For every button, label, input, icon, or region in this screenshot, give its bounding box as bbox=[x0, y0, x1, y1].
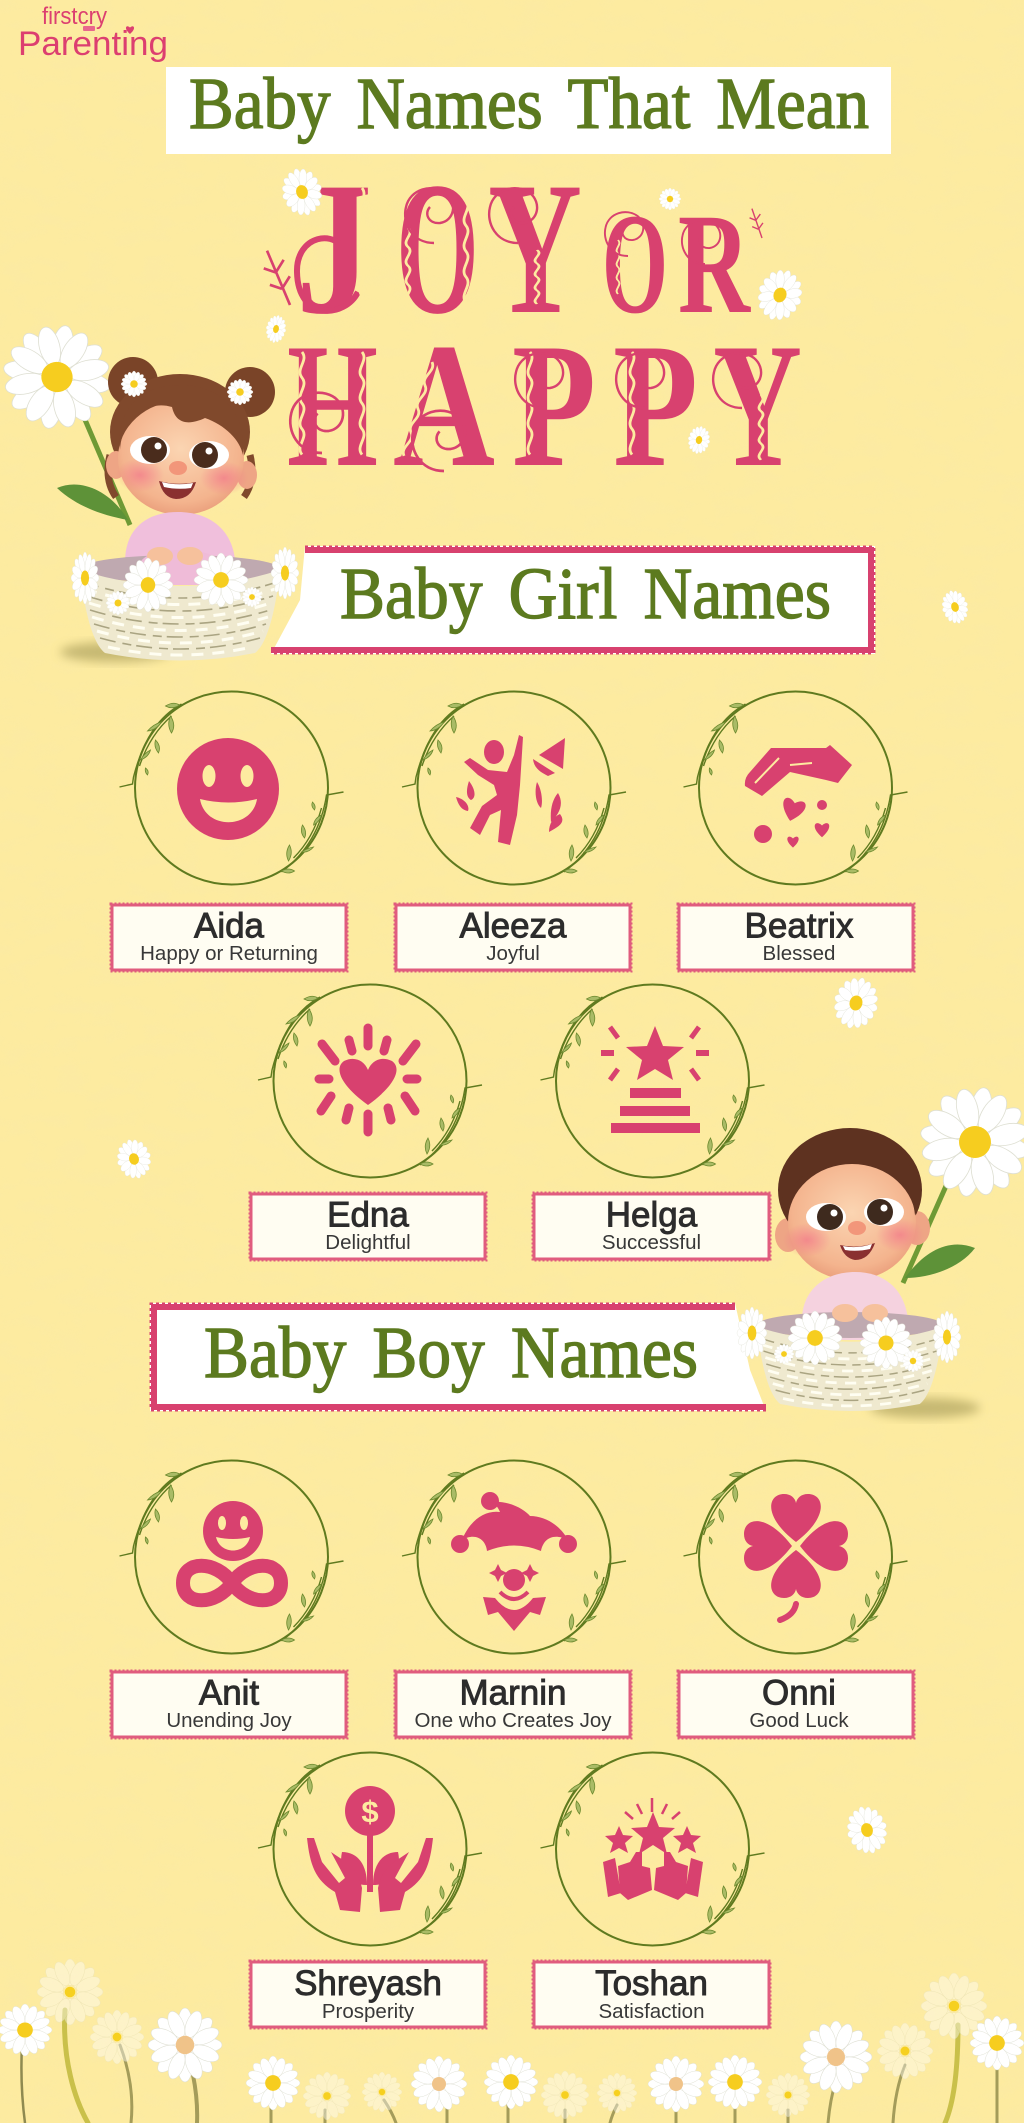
name: Beatrix: Blessed bbox=[763, 942, 835, 965]
name: Onni: Onni bbox=[762, 1674, 836, 1712]
icon: smile over infinity bbox=[183, 1501, 281, 1600]
hero lettering: JOY OR HAPPY: J bbox=[296, 144, 372, 354]
name: Anit: Unending Joy bbox=[166, 1709, 292, 1732]
hero lettering: JOY OR HAPPY: A bbox=[393, 306, 495, 504]
hero lettering: JOY OR HAPPY: Y bbox=[713, 306, 802, 504]
scattered daisies bbox=[112, 164, 972, 1858]
name: Anit bbox=[110, 1460, 348, 1738]
name: Beatrix bbox=[678, 692, 914, 972]
name: Marnin: One who Creates Joy bbox=[414, 1709, 612, 1732]
logo: FirstCry Parenting: Parenting bbox=[18, 25, 168, 63]
footer daisies bbox=[0, 1959, 1024, 2123]
banner: Baby Girl Names: Baby Girl Names bbox=[340, 553, 831, 634]
name: Marnin bbox=[394, 1460, 632, 1738]
icon: smiling face bbox=[177, 738, 279, 840]
name: Toshan bbox=[532, 1752, 770, 2028]
title banner: Baby Names That Mean bbox=[189, 63, 869, 144]
name: Aleeza: Joyful bbox=[486, 942, 540, 965]
icon: four leaf clover bbox=[744, 1494, 848, 1620]
name: Aleeza: Aleeza bbox=[459, 906, 567, 946]
name: Onni bbox=[678, 1460, 914, 1738]
name: Toshan: Satisfaction bbox=[599, 2000, 704, 2023]
hero lettering: JOY OR HAPPY: P bbox=[512, 306, 596, 504]
name: Aida bbox=[110, 692, 348, 972]
icon: jester clown bbox=[451, 1492, 577, 1631]
name: Helga: Helga bbox=[606, 1196, 698, 1234]
name: Marnin: Marnin bbox=[460, 1674, 566, 1712]
name: Edna: Delightful bbox=[325, 1231, 411, 1254]
name: Helga bbox=[532, 984, 770, 1260]
name: Aida: Aida bbox=[194, 906, 265, 946]
banner: Baby Boy Names: Baby Boy Names bbox=[204, 1312, 698, 1393]
name: Edna: Edna bbox=[327, 1196, 409, 1234]
logo: FirstCry Parenting: firstcry bbox=[42, 3, 107, 30]
hero lettering: JOY OR HAPPY bbox=[261, 144, 802, 504]
name: Edna bbox=[250, 984, 486, 1260]
icon: jumping person with party hat bbox=[456, 735, 565, 845]
name: Aleeza bbox=[394, 692, 632, 972]
name: Shreyash: Prosperity bbox=[322, 2000, 415, 2023]
icon: hands holding money plant bbox=[307, 1786, 433, 1912]
name: Anit: Anit bbox=[199, 1674, 259, 1712]
name: Aida: Happy or Returning bbox=[140, 942, 318, 965]
name: Shreyash bbox=[250, 1752, 486, 2028]
icon: star on podium bbox=[601, 1026, 709, 1133]
logo: FirstCry Parenting bbox=[18, 3, 168, 63]
banner: Baby Girl Names bbox=[271, 546, 875, 654]
name: Beatrix: Beatrix bbox=[745, 906, 854, 946]
name card group: girl names bbox=[110, 692, 914, 1260]
hero lettering: JOY OR HAPPY: Y bbox=[488, 144, 582, 354]
name: Helga: Successful bbox=[602, 1231, 701, 1254]
name: Onni: Good Luck bbox=[749, 1709, 849, 1732]
banner: Baby Boy Names bbox=[150, 1303, 766, 1411]
icon: hands holding money plant: $ bbox=[361, 1794, 379, 1829]
hero lettering: JOY OR HAPPY: H bbox=[287, 306, 378, 504]
baby girl in basket with daisy bbox=[0, 316, 299, 662]
icon: heart sun bbox=[319, 1028, 417, 1132]
name: Toshan: Toshan bbox=[595, 1964, 708, 2003]
name: Shreyash: Shreyash bbox=[294, 1964, 442, 2003]
icon: hand sprinkling hearts bbox=[745, 745, 852, 848]
baby boy in basket with daisy bbox=[737, 1078, 1024, 1418]
name card group: boy names bbox=[110, 1460, 914, 2028]
hero lettering: JOY OR HAPPY: O bbox=[602, 185, 668, 344]
icon: stars and thumbs up bbox=[603, 1798, 703, 1900]
hero lettering: JOY OR HAPPY: P bbox=[613, 306, 698, 504]
hero lettering: JOY OR HAPPY: R bbox=[678, 185, 751, 344]
hero lettering: JOY OR HAPPY: O bbox=[396, 144, 479, 354]
